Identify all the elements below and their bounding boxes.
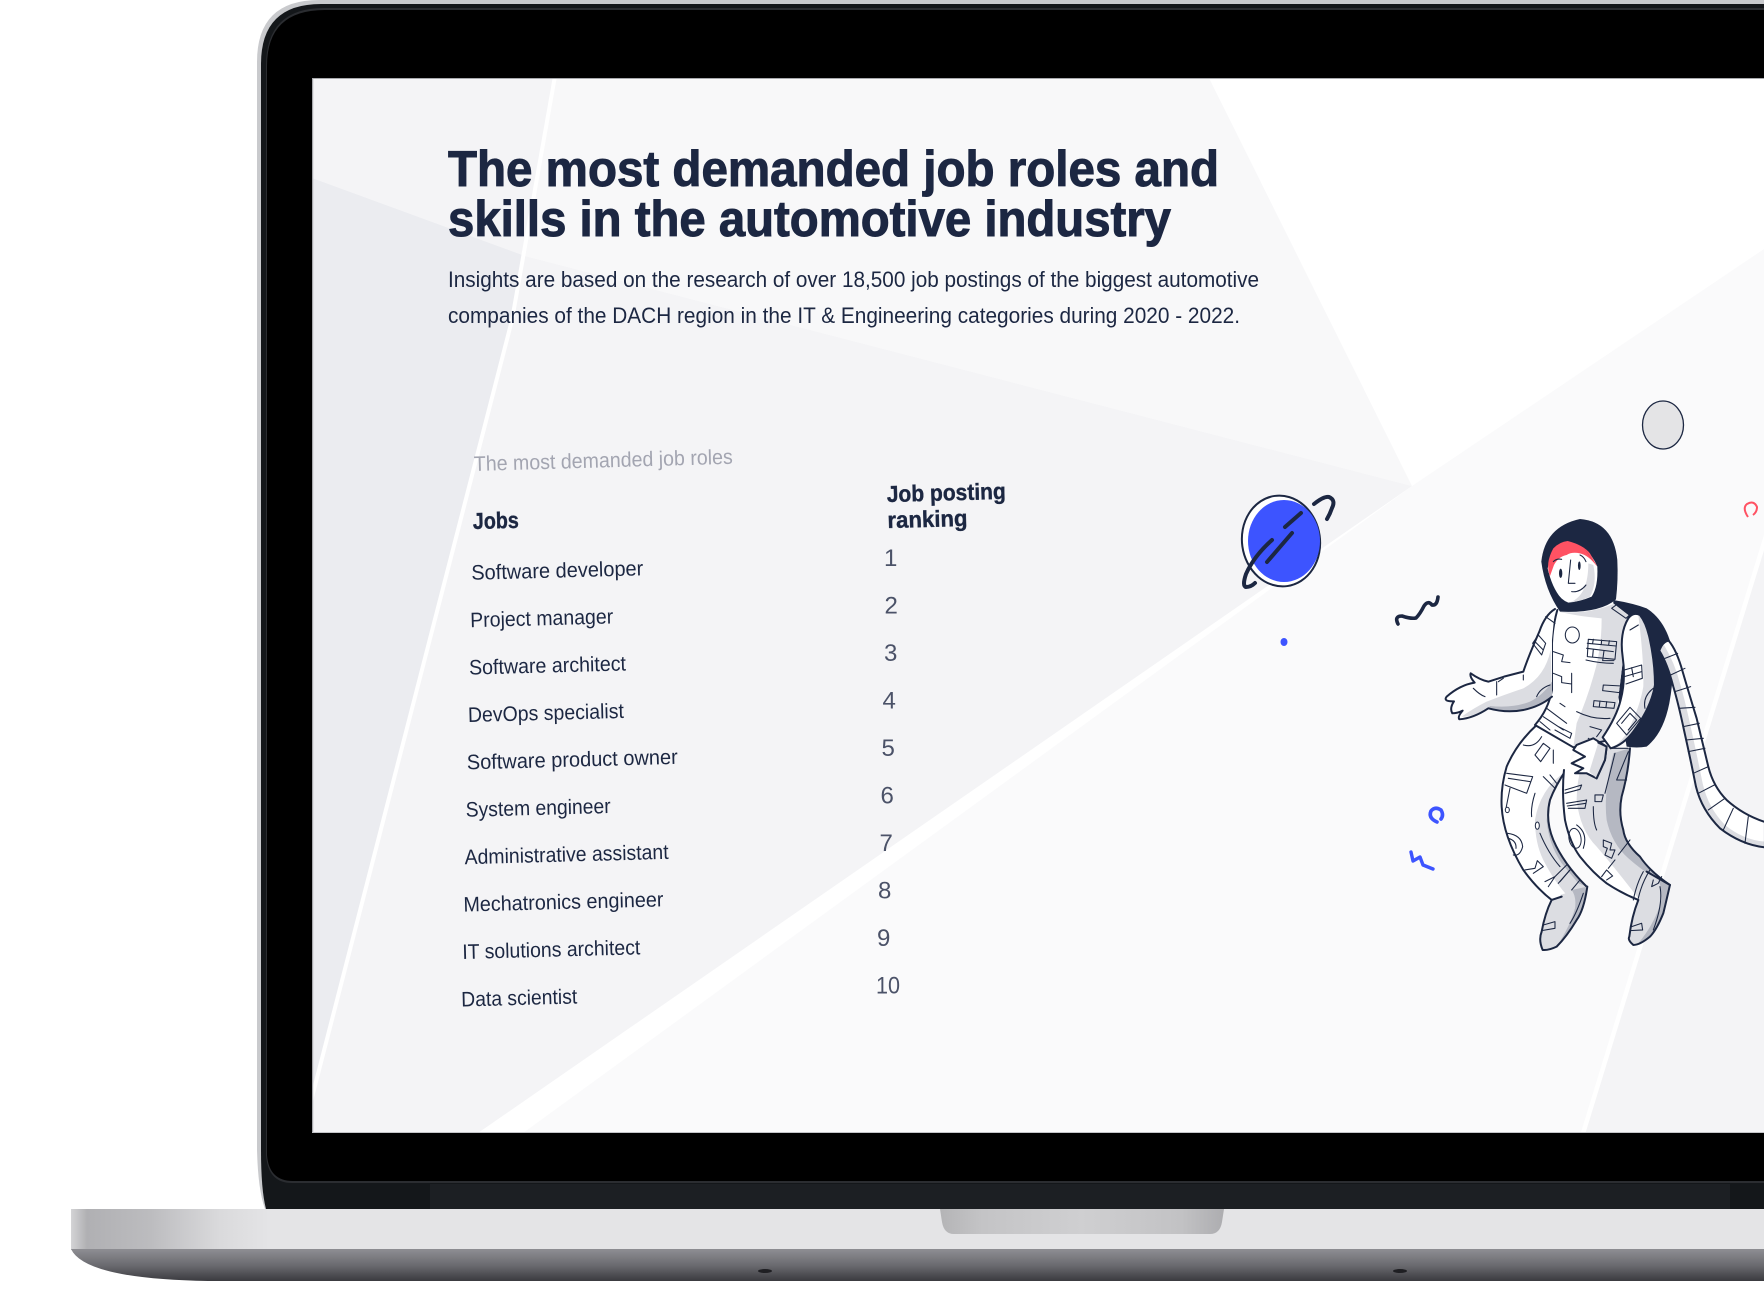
- ranking numbers: 8: [878, 878, 891, 904]
- laptop base: [71, 1209, 1764, 1281]
- job names: [461, 557, 678, 1011]
- icon: small blue dot: [1280, 638, 1288, 646]
- intro text: companies of the DACH region in the IT & Engineering categories during 2020 - 2022.: [448, 303, 1240, 328]
- column heading: job posting ranking: [886, 478, 1007, 533]
- backpack: [1613, 600, 1673, 747]
- icon: blue planet: [1236, 491, 1333, 591]
- job names: Software product owner: [467, 746, 678, 774]
- helmet hood: [1541, 519, 1618, 612]
- job names: Data scientist: [461, 985, 578, 1011]
- speaker dot left: [758, 1269, 772, 1273]
- job names: Project manager: [470, 605, 613, 632]
- shoulder strap: [1612, 603, 1632, 618]
- ranking numbers: 6: [880, 782, 894, 810]
- torso: [1535, 603, 1628, 747]
- title: [448, 141, 1219, 247]
- job names: Software architect: [469, 652, 626, 680]
- icon: dark squiggle: [1397, 597, 1438, 624]
- table: most demanded job roles: [461, 446, 1007, 1011]
- job names: IT solutions architect: [462, 936, 641, 964]
- icon: red arc: [1745, 503, 1757, 517]
- speaker dot right: [1393, 1269, 1407, 1273]
- job names: Mechatronics engineer: [463, 888, 664, 917]
- icon: grey moon: [1642, 401, 1684, 449]
- ranking numbers: 4: [882, 688, 896, 714]
- column heading: jobs: Jobs: [472, 507, 519, 534]
- ranking numbers: 1: [884, 545, 897, 572]
- trackpad notch: [940, 1209, 1224, 1234]
- job names: System engineer: [465, 795, 611, 822]
- job names: Administrative assistant: [464, 841, 669, 869]
- column heading: job posting ranking: ranking: [887, 505, 968, 533]
- right leg: [1563, 747, 1670, 900]
- ranking numbers: [876, 545, 900, 1000]
- right boot: [1629, 870, 1670, 945]
- icon: blue ring mark: [1430, 808, 1442, 822]
- ranking numbers: 3: [884, 640, 897, 667]
- table caption: The most demanded job roles: [473, 446, 733, 476]
- ranking numbers: 7: [880, 830, 893, 857]
- ranking numbers: 2: [884, 592, 898, 620]
- intro text: [448, 267, 1259, 328]
- ranking numbers: 10: [876, 972, 900, 1000]
- icon: blue squiggle: [1411, 852, 1433, 869]
- right arm: [1603, 614, 1655, 748]
- job names: Software developer: [471, 557, 644, 585]
- intro text: Insights are based on the research of over 18,500 job postings of the biggest automotive: [448, 267, 1259, 292]
- illustration: astronaut: [1446, 519, 1764, 950]
- screen background: [310, 76, 1764, 1140]
- job names: DevOps specialist: [468, 700, 624, 727]
- face: [1548, 541, 1597, 603]
- title: skills in the automotive industry: [448, 191, 1171, 247]
- left arm with hand: [1446, 609, 1555, 719]
- title: The most demanded job roles and: [448, 141, 1219, 197]
- left leg: [1502, 725, 1587, 900]
- ranking numbers: 9: [877, 925, 890, 952]
- left boot: [1540, 870, 1587, 950]
- oxygen tube: [1659, 641, 1764, 847]
- ranking numbers: 5: [882, 735, 895, 762]
- column heading: job posting ranking: Job posting: [886, 478, 1006, 507]
- right hand: [1572, 738, 1607, 778]
